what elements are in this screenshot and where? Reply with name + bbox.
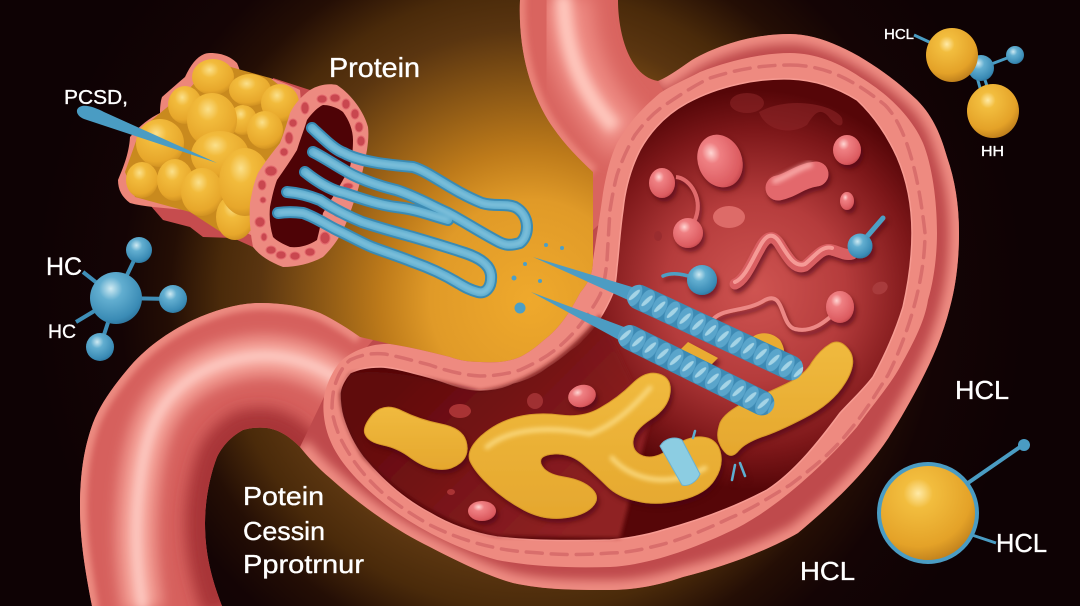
panel: fat cluster xyxy=(118,53,310,248)
label: Protein: Protein xyxy=(329,52,420,83)
cluster backing xyxy=(125,62,298,238)
needle: PCSD pointer xyxy=(77,106,217,163)
strands inner xyxy=(278,128,527,292)
panel: ring cross-section xyxy=(250,84,368,267)
panel: food particles in stomach xyxy=(468,128,883,521)
label: HCL sphere: HCL xyxy=(996,528,1047,558)
blob highlight xyxy=(487,388,705,480)
ring wall xyxy=(250,84,368,267)
small red balls xyxy=(468,382,598,521)
label: PCSD: PCSD, xyxy=(64,87,128,109)
light blue band on blob xyxy=(660,438,700,485)
molecule: bottom right gold sphere xyxy=(879,439,1030,562)
vertical blob bits xyxy=(677,333,784,368)
drill enzyme upper xyxy=(533,257,807,384)
label: HH: HH xyxy=(981,143,1004,160)
strands outer xyxy=(278,128,527,292)
stomach inner band xyxy=(323,53,937,567)
molecule: top right gold xyxy=(914,28,1024,138)
small cell xyxy=(833,135,861,165)
lower cavity shade xyxy=(340,315,650,538)
linked cells xyxy=(649,168,703,248)
stomach outer wall xyxy=(290,25,970,600)
label: HCL bottom: HCL xyxy=(800,556,855,586)
panel: yellow protein blobs xyxy=(364,333,853,518)
large branched blob xyxy=(469,373,721,518)
large oval cell xyxy=(689,128,751,194)
drill enzyme lower xyxy=(531,292,779,420)
label: HCL top: HCL xyxy=(884,26,914,43)
strands highlight xyxy=(278,128,527,292)
dim spots xyxy=(447,206,890,495)
stomach cavity xyxy=(340,79,912,541)
molecule: left blue xyxy=(76,237,187,361)
duodenum tube xyxy=(80,303,373,606)
label: list of terms: Pprotrnur xyxy=(243,549,364,579)
label: list of terms xyxy=(243,481,364,579)
label: HC large: HC xyxy=(46,253,82,281)
dim folds xyxy=(730,93,843,131)
right blob xyxy=(718,342,853,455)
label: HCL right: HCL xyxy=(955,375,1009,405)
tiny cell xyxy=(840,192,854,210)
panel: blue protein strands xyxy=(278,128,527,292)
label: HC small: HC xyxy=(48,322,76,343)
cluster pink casing xyxy=(118,53,305,237)
sausage blob xyxy=(364,407,467,469)
panel: stomach xyxy=(290,0,970,600)
small blue fragments xyxy=(693,431,745,480)
ring lumen xyxy=(270,105,353,247)
blue particle left xyxy=(663,265,717,295)
blue particle right xyxy=(848,218,883,258)
thin wiggle with cell xyxy=(711,291,854,330)
fat globules xyxy=(126,59,299,240)
label: list of terms: Cessin xyxy=(243,516,325,546)
bean cell xyxy=(778,174,816,188)
squiggle xyxy=(735,236,852,284)
ring cells xyxy=(255,94,365,260)
band dashes xyxy=(332,65,925,554)
label: list of terms: Potein xyxy=(243,481,324,511)
droplets xyxy=(512,243,564,314)
esophagus tube xyxy=(520,0,663,230)
bean highlight xyxy=(775,165,810,181)
cluster dark rim xyxy=(150,78,310,248)
